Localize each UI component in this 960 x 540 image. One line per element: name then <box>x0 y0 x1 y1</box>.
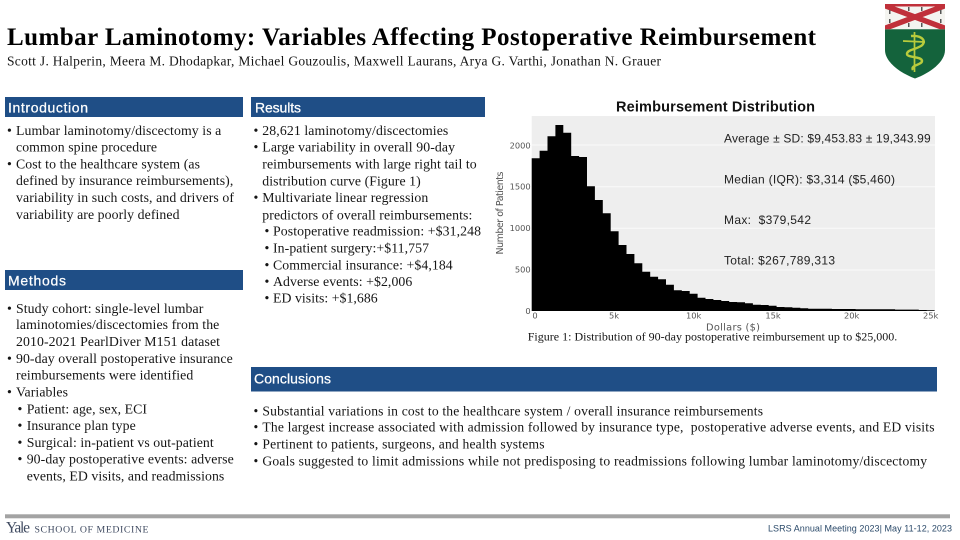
results bullet list: Multivariate linear regression <box>262 190 428 205</box>
histogram bars <box>532 125 935 311</box>
panel: results <box>251 97 485 306</box>
conclusions bullet list: • <box>254 437 258 452</box>
footer: meeting information: LSRS Annual Meeting 2023| May 11-12, 2023 <box>768 524 952 534</box>
introduction bullet list: defined by insurance reimbursements), <box>16 173 233 189</box>
results bullet list: In-patient surgery:+$11,757 <box>273 240 429 255</box>
panel: conclusions <box>251 367 937 469</box>
results bullet list: Adverse events: +$2,006 <box>273 274 412 289</box>
footer logo: Yale School of Medicine: Yale <box>6 520 30 537</box>
introduction bullet list: Lumbar laminotomy/discectomy is a <box>16 123 221 138</box>
footer logo: Yale School of Medicine <box>6 520 149 537</box>
methods bullet list: • <box>7 385 12 400</box>
results bullet list: • <box>254 139 258 154</box>
methods bullet list: events, ED visits, and readmissions <box>27 469 224 484</box>
results bullet list: • <box>254 190 258 205</box>
summary statistics: Total: $267,789,313 <box>724 253 835 267</box>
methods bullet list: • <box>18 401 22 416</box>
results bullet list: distribution curve (Figure 1) <box>262 173 421 189</box>
chart title: Reimbursement Distribution <box>616 100 815 116</box>
methods bullet list: Surgical: in-patient vs out-patient <box>27 435 214 450</box>
chart: reimbursement distribution histogram <box>495 100 939 334</box>
x axis ticks: 20k <box>844 310 860 320</box>
introduction bullet list: • <box>7 123 12 138</box>
heading: introduction <box>5 97 243 117</box>
methods bullet list: • <box>18 452 22 467</box>
authors: Scott J. Halperin, Meera M. Dhodapkar, Michael Gouzoulis, Maxwell Laurans, Arya G. Varthi, Jonathan N. Grauer <box>7 54 662 68</box>
summary statistics: Max: $379,542 <box>724 213 811 227</box>
conclusions bullet list: The largest increase associated with admission followed by insurance type, postoperative adverse events, and ED visits <box>262 420 934 435</box>
y axis ticks <box>510 140 531 316</box>
methods bullet list: Study cohort: single-level lumbar <box>16 301 204 316</box>
methods bullet list: laminotomies/discectomies from the <box>16 317 219 332</box>
results bullet list: • <box>254 123 258 138</box>
summary statistics: Median (IQR): $3,314 ($5,460) <box>724 172 895 186</box>
introduction bullet list: Cost to the healthcare system (as <box>16 156 200 172</box>
results bullet list: 28,621 laminotomy/discectomies <box>262 123 448 138</box>
methods bullet list: Insurance plan type <box>27 418 136 433</box>
methods bullet list: • <box>7 351 12 366</box>
results bullet list: Large variability in overall 90-day <box>262 139 455 154</box>
summary statistics <box>724 132 931 267</box>
y axis ticks: 1500 <box>510 181 531 191</box>
heading: results <box>251 97 485 117</box>
methods bullet list: 90-day postoperative events: adverse <box>27 452 234 467</box>
panel: methods <box>5 270 243 484</box>
title: Lumbar Laminotomy: Variables Affecting Postoperative Reimbursement <box>7 24 817 51</box>
conclusions bullet list: • <box>254 454 258 469</box>
results bullet list: • <box>264 257 270 272</box>
results bullet list: • <box>264 240 270 255</box>
y axis ticks: 1000 <box>510 223 531 233</box>
figure caption: Figure 1: Distribution of 90-day postoperative reimbursement up to $25,000. <box>528 330 897 344</box>
results bullet list: predictors of overall reimbursements: <box>262 207 472 222</box>
x axis ticks: 25k <box>923 310 939 320</box>
plot area <box>532 116 935 311</box>
methods bullet list <box>7 301 234 484</box>
footer logo: Yale School of Medicine: SCHOOL OF MEDICINE <box>34 525 149 536</box>
methods bullet list: • <box>7 301 12 316</box>
y axis label: Number of Patients <box>495 171 506 254</box>
y axis ticks: 500 <box>515 265 531 275</box>
x axis label: Dollars ($) <box>706 323 760 334</box>
methods bullet list: 90-day overall postoperative insurance <box>16 351 233 366</box>
heading: conclusions <box>251 367 937 392</box>
introduction bullet list: variability are poorly defined <box>16 207 180 222</box>
x axis ticks: 10k <box>686 310 702 320</box>
conclusions bullet list: • <box>254 404 258 419</box>
conclusions bullet list: Goals suggested to limit admissions while not predisposing to readmissions following lumbar laminotomy/discectomy <box>262 454 927 469</box>
results bullet list: • <box>264 223 270 238</box>
methods bullet list: Variables <box>16 385 68 400</box>
heading: results: Results <box>255 100 301 116</box>
introduction bullet list: variability in such costs, and drivers of <box>16 190 234 205</box>
results bullet list <box>254 123 481 306</box>
introduction bullet list: common spine procedure <box>16 140 157 155</box>
results bullet list: reimbursements with large right tail to <box>262 156 477 171</box>
heading: methods: Methods <box>8 273 66 289</box>
y axis ticks: 0 <box>525 306 531 316</box>
conclusions bullet list: Pertinent to patients, surgeons, and health systems <box>262 437 544 452</box>
conclusions bullet list: • <box>254 420 258 435</box>
x axis ticks: 0 <box>532 310 538 320</box>
summary statistics: Average ± SD: $9,453.83 ± 19,343.99 <box>724 132 931 146</box>
methods bullet list: 2010-2021 PearlDiver M151 dataset <box>16 334 220 349</box>
methods bullet list: • <box>18 418 22 433</box>
introduction bullet list: • <box>7 156 12 171</box>
heading: methods <box>5 270 243 290</box>
x axis ticks <box>532 310 939 320</box>
y axis ticks: 2000 <box>510 140 531 150</box>
conclusions bullet list: Substantial variations in cost to the healthcare system / overall insurance reimbursements <box>262 404 763 419</box>
methods bullet list: reimbursements were identified <box>16 368 193 383</box>
results bullet list: Commercial insurance: +$4,184 <box>273 257 453 272</box>
results bullet list: Postoperative readmission: +$31,248 <box>273 223 481 238</box>
results bullet list: ED visits: +$1,686 <box>273 291 378 306</box>
heading: introduction: Introduction <box>8 100 88 116</box>
x axis ticks: 15k <box>765 310 781 320</box>
panel: introduction <box>5 97 243 222</box>
methods bullet list: • <box>18 435 22 450</box>
conclusions bullet list <box>254 404 934 469</box>
heading: conclusions: Conclusions <box>254 370 331 386</box>
x axis ticks: 5k <box>609 310 619 320</box>
icon: Yale medicine shield <box>883 4 947 78</box>
results bullet list: • <box>264 274 270 289</box>
introduction bullet list <box>7 123 234 222</box>
methods bullet list: Patient: age, sex, ECI <box>27 401 147 416</box>
results bullet list: • <box>264 291 270 306</box>
